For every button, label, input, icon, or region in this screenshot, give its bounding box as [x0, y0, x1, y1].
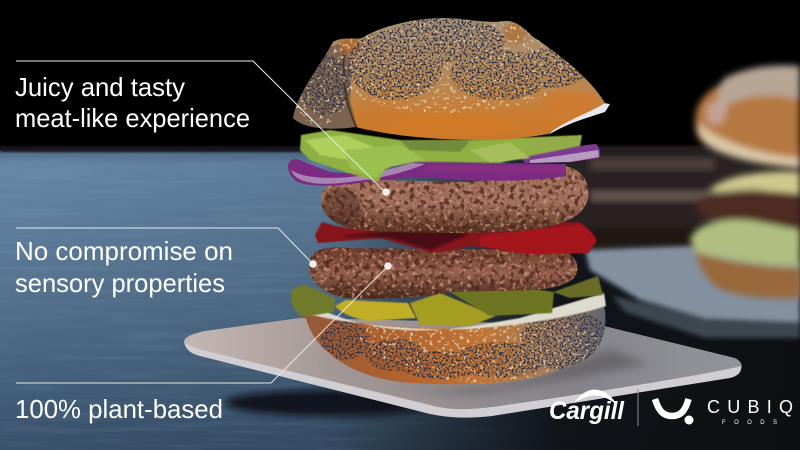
front plate: [184, 318, 742, 418]
burger shadow on table: [225, 390, 435, 416]
callout: juicy and tasty: Juicy and tasty: [15, 72, 185, 102]
callout: plant-based: [15, 262, 392, 424]
logo: Cubiq Foods: [655, 397, 793, 426]
callout: juicy and tasty: [15, 61, 390, 196]
logo: Cubiq Foods: FOODS: [722, 420, 777, 426]
callout: sensory properties: sensory properties: [15, 268, 225, 298]
cream and pickles: [291, 276, 606, 330]
logo: Cargill: Cargill: [549, 397, 625, 425]
logo divider: [638, 389, 639, 426]
background burger (blurred): [690, 65, 800, 299]
callout: plant-based: 100% plant-based: [15, 394, 223, 424]
red onion: [288, 144, 600, 186]
upper patty: [318, 165, 593, 235]
callout: sensory properties: No compromise on: [15, 236, 233, 266]
lettuce: [300, 130, 582, 182]
background plate (blurred): [585, 246, 800, 338]
callout: juicy and tasty: meat-like experience: [15, 103, 250, 133]
top bun: [290, 17, 610, 140]
lower patty: [308, 248, 578, 299]
logo: Cubiq Foods: CUBIQ: [707, 397, 793, 417]
bottom bun: [304, 305, 610, 384]
beet: [315, 222, 596, 254]
burger: [288, 17, 610, 384]
icon: cubiq mark: [655, 399, 694, 424]
callout: sensory properties: [15, 228, 317, 298]
